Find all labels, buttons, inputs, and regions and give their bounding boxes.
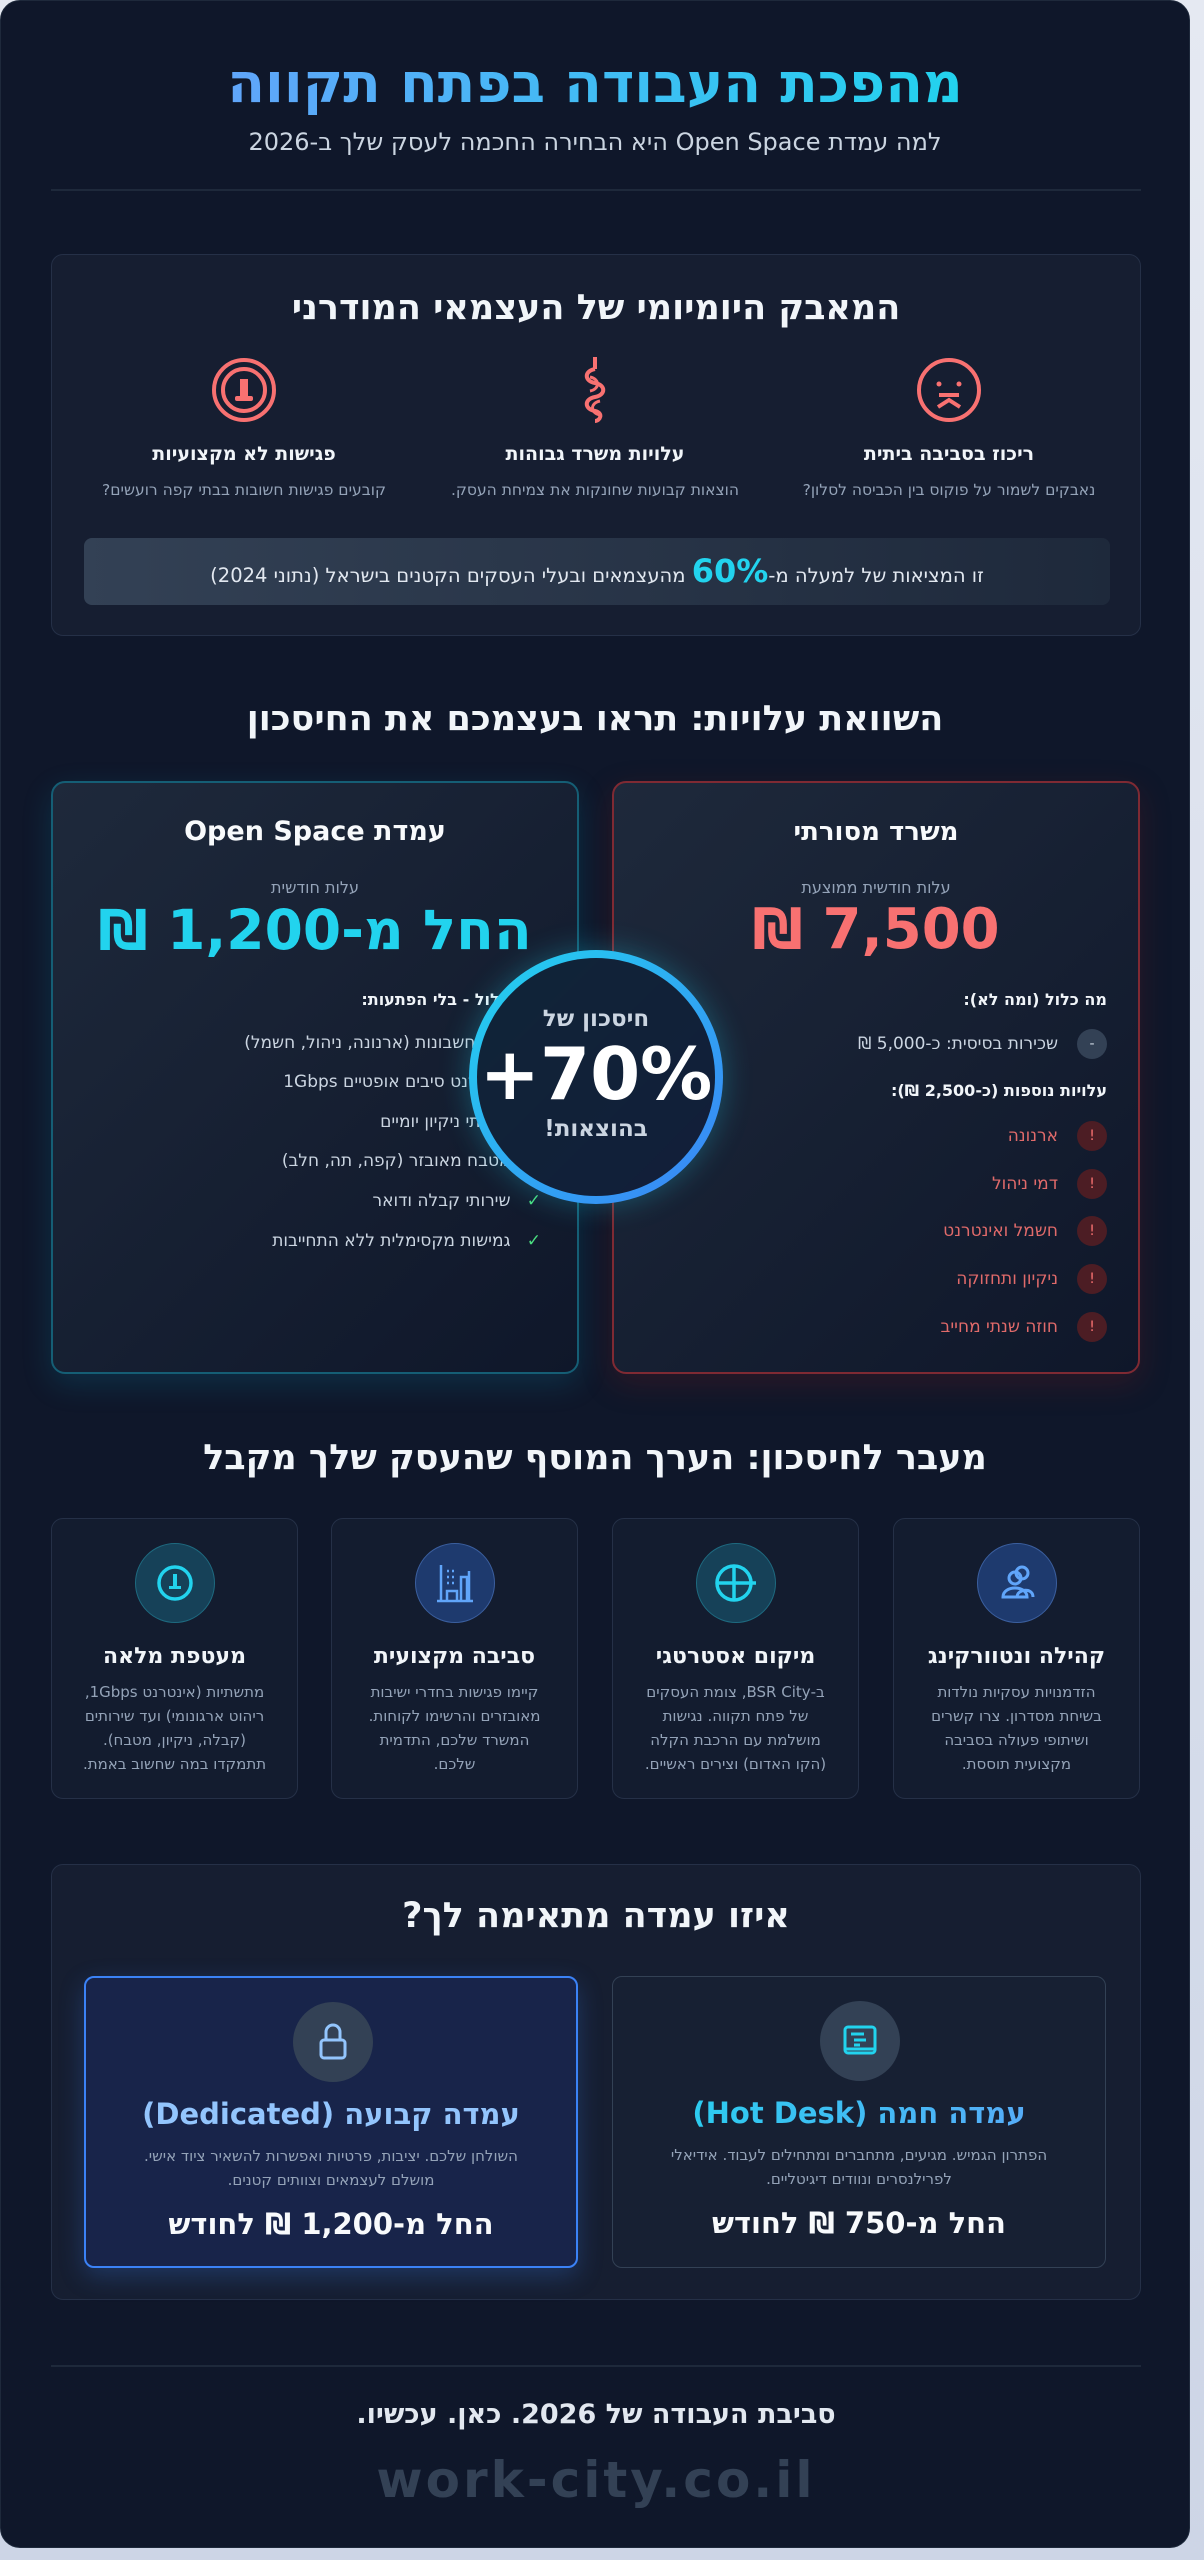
extra items: ! <box>1089 1271 1095 1287</box>
card: full package: מתשתיות (אינטרנט 1Gbps, ריהוט ארגונומי) ועד שירותים (קבלה, ניקיון, מטבח). תתמקדו במה שחשוב באמת. <box>83 1683 266 1773</box>
item: home focus <box>803 358 1095 499</box>
icon: lock <box>293 2002 373 2082</box>
card title: עמדת Open Space <box>184 816 446 847</box>
extra items <box>941 1121 1107 1342</box>
plan: dedicated: השולחן שלכם. יציבות, פרטיות ואפשרות להשאיר ציוד אישי. <box>144 2147 518 2165</box>
item: office costs: הוצאות קבועות שחונקות את צמיחת העסק. <box>451 481 739 499</box>
item: home focus: ריכוז בסביבה ביתית <box>864 443 1034 465</box>
extra items: ! <box>1089 1176 1095 1192</box>
card: full package: מעטפת מלאה <box>103 1644 246 1669</box>
plan: dedicated: מושלם לעצמאים וצוותים קטנים. <box>228 2171 434 2189</box>
included list: ✓ כל החשבונות (ארנונה, ניהול, חשמל) <box>244 1033 541 1053</box>
item: unprofessional meetings: קובעים פגישות חשובות בבתי קפה רועשים? <box>102 481 386 499</box>
list header: מה כלול (ומה לא): <box>963 990 1107 1009</box>
plan: hot desk: החל מ-750 ₪ לחודש <box>712 2206 1006 2240</box>
heading: struggle: המאבק היומיומי של העצמאי המודרני <box>292 288 900 328</box>
price: החל מ-1,200 ₪ <box>98 898 532 962</box>
card: community <box>893 1518 1140 1799</box>
extra items: ארנונה <box>1008 1126 1058 1146</box>
label: עלות חודשית <box>271 878 359 897</box>
included list: ✓ מטבח מאובזר (קפה, תה, חלב) <box>282 1151 541 1171</box>
extra items: ניקיון ותחזוקה <box>956 1269 1058 1289</box>
plan: hot desk <box>612 1976 1106 2268</box>
extra items: ! <box>1089 1319 1095 1335</box>
subtitle: למה עמדת Open Space היא הבחירה החכמה לעסק שלך ב-2026 <box>248 128 942 156</box>
card: professional environment: קיימו פגישות בחדרי ישיבות מאובזרים והרשימו לקוחות. המשרד שלכם, התדמית שלכם. <box>369 1683 540 1773</box>
included list: ✓ שירותי קבלה ודואר <box>373 1191 541 1211</box>
card title: משרד מסורתי <box>793 817 958 847</box>
icon: building <box>415 1543 495 1623</box>
extra items: חשמל ואינטרנט <box>943 1221 1058 1241</box>
title: מהפכת העבודה בפתח תקווה <box>227 51 963 115</box>
callout: savings circle: +70% <box>480 1032 712 1116</box>
heading: added value: מעבר לחיסכון: הערך המוסף שהעסק שלך מקבל <box>203 1438 987 1478</box>
icon: people <box>977 1543 1057 1623</box>
callout: savings circle <box>469 950 723 1204</box>
footer url: work-city.co.il <box>376 2451 816 2509</box>
icon: badge <box>135 1543 215 1623</box>
item: office costs <box>451 357 739 499</box>
plan: hot desk: הפתרון הגמיש. מגיעים, מתחברים ומתחילים לעבוד. אידיאלי לפרילנסרים ונוודים דיגיטליים. <box>671 2146 1047 2188</box>
base rent item <box>858 1029 1107 1059</box>
base rent item: - <box>1089 1036 1095 1052</box>
icon: sad face <box>917 358 981 422</box>
included list: ✓ שירותי ניקיון יומיים <box>380 1112 541 1132</box>
panel: open space <box>51 781 579 1374</box>
item: unprofessional meetings: פגישות לא מקצועיות <box>152 443 336 465</box>
card: location: ב-BSR City, צומת העסקים של פתח תקווה. נגישות מושלמת עם הרכבת הקלה (הקו האדום) וצירים ראשיים. <box>645 1683 826 1773</box>
base rent item: שכירות בסיסית: כ-5,000 ₪ <box>858 1034 1058 1054</box>
item: home focus: נאבקים לשמור על פוקוס בין הכביסה לסלון? <box>803 481 1095 499</box>
card: location <box>612 1518 859 1799</box>
footer tagline: סביבת העבודה של 2026. כאן. עכשיו. <box>356 2399 836 2430</box>
extra items: חוזה שנתי מחייב <box>941 1317 1058 1337</box>
callout: savings circle: חיסכון של <box>543 1006 649 1032</box>
panel: traditional office <box>612 781 1140 1374</box>
card: professional environment <box>331 1518 578 1799</box>
item: office costs: עלויות משרד גבוהות <box>506 443 684 465</box>
callout: savings circle: בהוצאות! <box>544 1116 648 1142</box>
included list: ✓ גמישות מקסימלית ללא התחייבות <box>272 1231 541 1251</box>
stat bar: זו המציאות של למעלה מ-60% מהעצמאים ובעלי העסקים הקטנים בישראל (נתוני 2024) <box>210 552 984 590</box>
plan: dedicated: החל מ-1,200 ₪ לחודש <box>168 2207 494 2241</box>
card: community: הזדמנויות עסקיות נולדות בשיחת מסדרון. צרו קשרים ושיתופי פעולה בסביבה מקצועית תוססת. <box>931 1683 1102 1773</box>
plan: hot desk: עמדה חמה (Hot Desk) <box>692 2096 1026 2130</box>
card: professional environment: סביבה מקצועית <box>374 1644 535 1669</box>
panel: daily struggle <box>51 254 1141 636</box>
label: עלות חודשית ממוצעת <box>801 878 951 897</box>
panel: which desk fits <box>51 1864 1141 2300</box>
icon: screen <box>820 2001 900 2081</box>
icon: shekel knot <box>584 357 606 423</box>
included list: ✓ אינטרנט סיבים אופטיים 1Gbps <box>283 1072 541 1092</box>
included list <box>244 1033 541 1251</box>
price: 7,500 ₪ <box>752 897 1000 962</box>
heading: which desk: איזו עמדה מתאימה לך? <box>402 1896 790 1936</box>
card: full package <box>51 1518 298 1799</box>
heading: cost comparison: השוואת עלויות: תראו בעצמכם את החיסכון <box>247 699 943 739</box>
list header: הכל כלול - בלי הפתעות: <box>361 990 544 1009</box>
card: community: קהילה ונטוורקינג <box>928 1644 1105 1669</box>
extra items: ! <box>1089 1128 1095 1144</box>
extra items: דמי ניהול <box>992 1174 1058 1194</box>
card: location: מיקום אסטרטגי <box>656 1644 815 1669</box>
plan: dedicated: עמדה קבועה (Dedicated) <box>142 2097 520 2131</box>
icon: coffee badge <box>212 358 276 422</box>
plan: dedicated <box>84 1976 578 2268</box>
icon: target <box>696 1543 776 1623</box>
extra header: עלויות נוספות (כ-2,500 ₪): <box>891 1081 1107 1100</box>
item: unprofessional meetings <box>102 358 386 499</box>
extra items: ! <box>1089 1223 1095 1239</box>
stat bar <box>84 538 1110 605</box>
